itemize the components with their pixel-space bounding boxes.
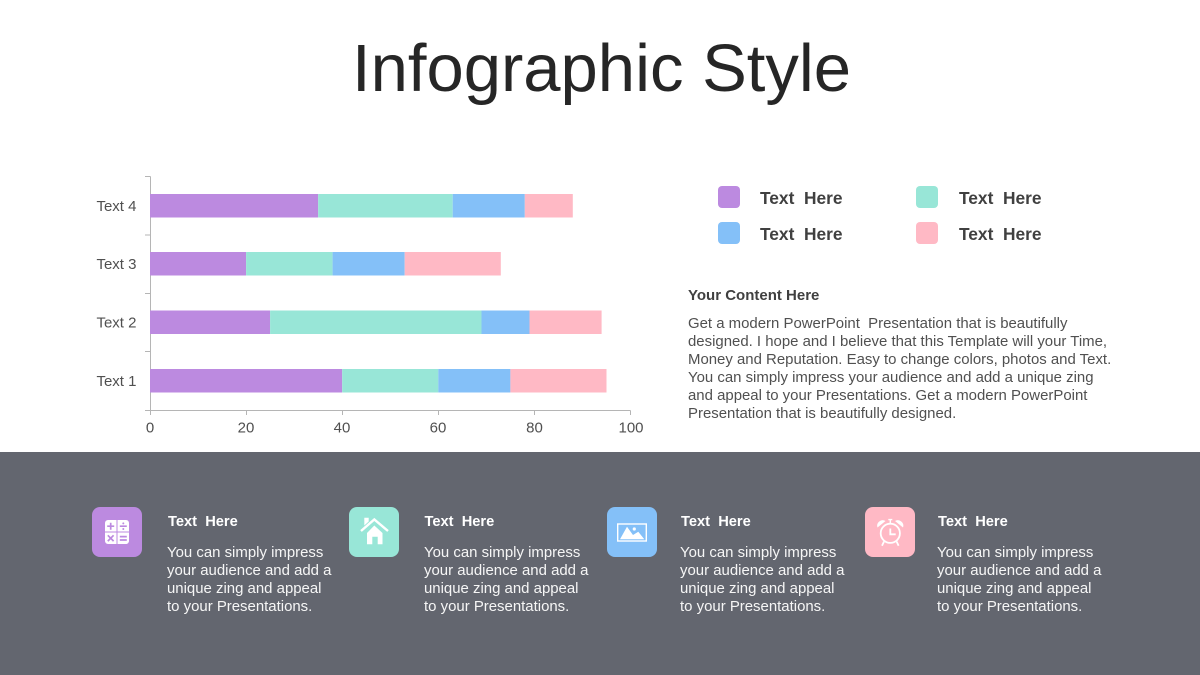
content paragraph: Money and Reputation. Easy to change colors, photos and Text. xyxy=(688,351,1111,368)
bar: Text 2 xyxy=(150,310,602,334)
icon: calculator xyxy=(92,507,142,557)
legend swatch: teal xyxy=(916,186,938,208)
card text: unique zing and appeal xyxy=(680,580,834,597)
value axis labels: 60 xyxy=(430,420,446,436)
card text xyxy=(424,544,588,615)
value axis labels: 80 xyxy=(526,420,543,436)
legend label: purple: Text Here xyxy=(760,188,843,208)
category axis labels: Text 2 xyxy=(96,314,136,332)
card text: to your Presentations. xyxy=(680,598,825,615)
card text: unique zing and appeal xyxy=(937,580,1092,597)
bar: Text 4 xyxy=(150,194,573,218)
category axis labels: Text 1 xyxy=(96,373,136,390)
card text: your audience and add a xyxy=(424,562,588,579)
card text: to your Presentations. xyxy=(424,598,569,615)
icon: alarm clock xyxy=(865,507,915,557)
content paragraph: Get a modern PowerPoint Presentation that is beautifully xyxy=(688,315,1067,332)
value axis labels: 40 xyxy=(334,420,350,436)
card text: You can simply impress xyxy=(937,544,1093,561)
legend xyxy=(718,186,1042,244)
card text xyxy=(167,544,332,615)
bottom band xyxy=(0,452,1200,675)
value axis labels xyxy=(146,420,644,436)
category axis labels: Text 3 xyxy=(96,256,136,273)
legend label: pink: Text Here xyxy=(959,224,1042,244)
card text: unique zing and appeal xyxy=(424,580,578,597)
card text: your audience and add a xyxy=(167,562,331,579)
bar: Text 3 xyxy=(150,252,501,276)
card title: Text Here xyxy=(168,514,238,530)
card text: You can simply impress xyxy=(424,544,580,561)
legend label: blue: Text Here xyxy=(760,224,843,244)
content paragraph: and appeal to your Presentations. Get a modern PowerPoint xyxy=(688,387,1087,404)
card title: Text Here xyxy=(681,514,751,530)
card text: to your Presentations. xyxy=(937,598,1082,615)
card 1 xyxy=(92,507,332,615)
bar: Text 1 xyxy=(150,369,606,392)
legend swatch: pink xyxy=(916,222,938,244)
stacked bar chart xyxy=(96,176,644,436)
content heading: Your Content Here xyxy=(688,287,819,304)
card text xyxy=(937,544,1102,615)
icon: picture xyxy=(607,507,657,557)
legend label: teal: Text Here xyxy=(959,188,1042,208)
category axis labels: Text 4 xyxy=(96,198,136,215)
content paragraph: Presentation that is beautifully designed. xyxy=(688,405,956,422)
icon: house xyxy=(349,507,399,557)
title: Infographic Style xyxy=(352,31,851,106)
card text: You can simply impress xyxy=(167,544,323,561)
card text: You can simply impress xyxy=(680,544,836,561)
card title: Text Here xyxy=(424,514,494,530)
card text xyxy=(680,544,844,615)
content paragraph xyxy=(688,315,1111,422)
value axis labels: 100 xyxy=(618,420,644,436)
card text: to your Presentations. xyxy=(167,598,312,615)
value axis labels: 20 xyxy=(238,420,254,436)
content paragraph: designed. I hope and I believe that this Template will your Time, xyxy=(688,333,1107,350)
card text: unique zing and appeal xyxy=(167,580,322,597)
card 4 xyxy=(865,507,1102,615)
category axis labels xyxy=(96,198,136,390)
legend swatch: blue xyxy=(718,222,740,244)
card 2 xyxy=(349,507,588,615)
value axis labels: 0 xyxy=(146,420,154,436)
card text: your audience and add a xyxy=(680,562,844,579)
card text: your audience and add a xyxy=(937,562,1101,579)
card title: Text Here xyxy=(938,514,1008,530)
card 3 xyxy=(607,507,844,615)
content paragraph: You can simply impress your audience and add a unique zing xyxy=(688,369,1094,386)
legend swatch: purple xyxy=(718,186,740,208)
